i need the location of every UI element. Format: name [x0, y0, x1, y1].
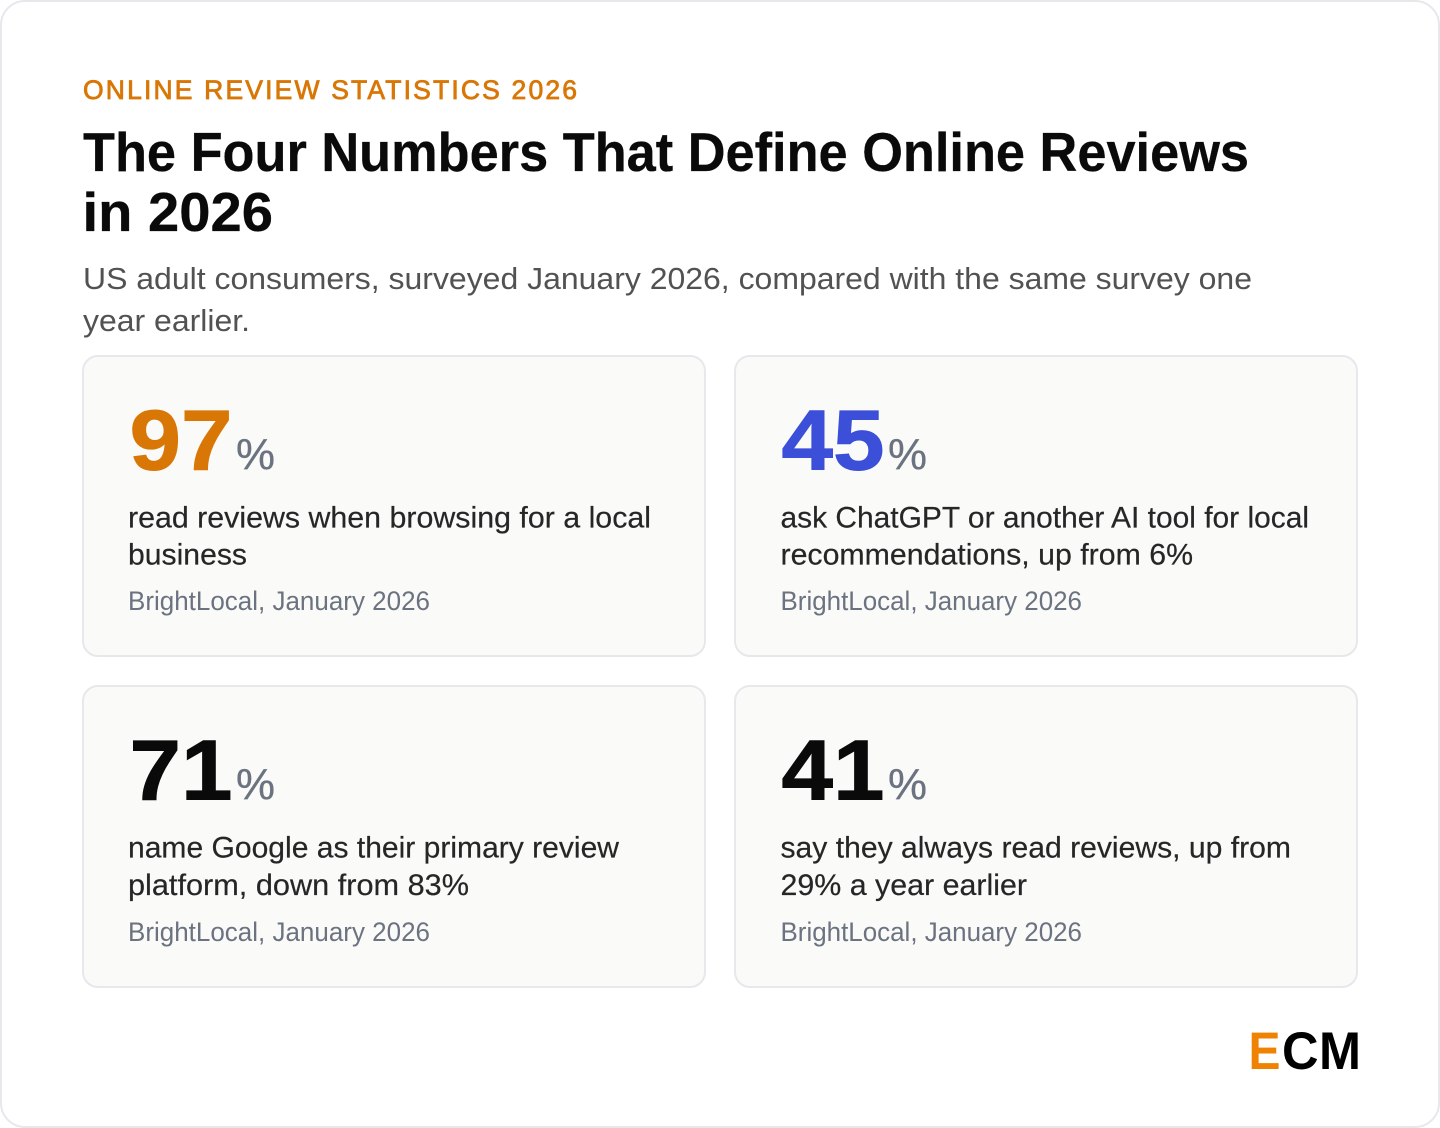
number: 41%: %	[888, 760, 927, 809]
number: 97%: %	[236, 430, 275, 479]
description	[780, 832, 1291, 902]
logo: ECM: E	[1248, 1022, 1280, 1081]
description: recommendations, up from 6%	[780, 538, 1193, 572]
subtitle: US adult consumers, surveyed January 2026, compared with the same survey one	[83, 261, 1252, 296]
number: 41%: 41	[782, 724, 884, 818]
subtitle	[83, 261, 1252, 338]
number: 45%: %	[888, 430, 927, 479]
description: say they always read reviews, up from	[780, 832, 1291, 864]
description: platform, down from 83%	[128, 869, 469, 902]
eyebrow: ONLINE REVIEW STATISTICS 2026	[83, 75, 577, 105]
description	[128, 832, 619, 902]
source: BrightLocal, January 2026	[780, 917, 1082, 947]
panel: 41 percent stat	[735, 686, 1357, 987]
panel: 45 percent stat	[735, 356, 1357, 656]
number: 97%: 97	[130, 394, 232, 488]
description: read reviews when browsing for a local	[128, 502, 651, 534]
description: business	[128, 538, 247, 572]
title: The Four Numbers That Define Online Reviews	[83, 122, 1249, 183]
number: 41%	[782, 724, 927, 818]
source: BrightLocal, January 2026	[128, 917, 430, 947]
description: ask ChatGPT or another AI tool for local	[780, 502, 1309, 534]
number: 71%: %	[236, 760, 275, 809]
number: 71%: 71	[130, 724, 232, 818]
description	[128, 502, 651, 572]
panel: 97 percent stat	[83, 356, 705, 656]
description: 29% a year earlier	[780, 869, 1027, 902]
number: 45%	[782, 394, 927, 488]
source: BrightLocal, January 2026	[780, 586, 1082, 616]
description: name Google as their primary review	[128, 832, 619, 864]
title	[82, 122, 1249, 243]
number: 45%: 45	[782, 394, 884, 488]
description	[780, 502, 1309, 572]
number: 71%	[130, 724, 275, 818]
title: in 2026	[82, 182, 273, 243]
panel: 71 percent stat	[83, 686, 705, 987]
subtitle: year earlier.	[83, 303, 250, 338]
logo: ECM: C	[1282, 1022, 1318, 1081]
logo: ECM: M	[1319, 1022, 1361, 1081]
number: 97%	[130, 394, 275, 488]
logo: ECM	[1248, 1022, 1361, 1081]
source: BrightLocal, January 2026	[128, 586, 430, 616]
